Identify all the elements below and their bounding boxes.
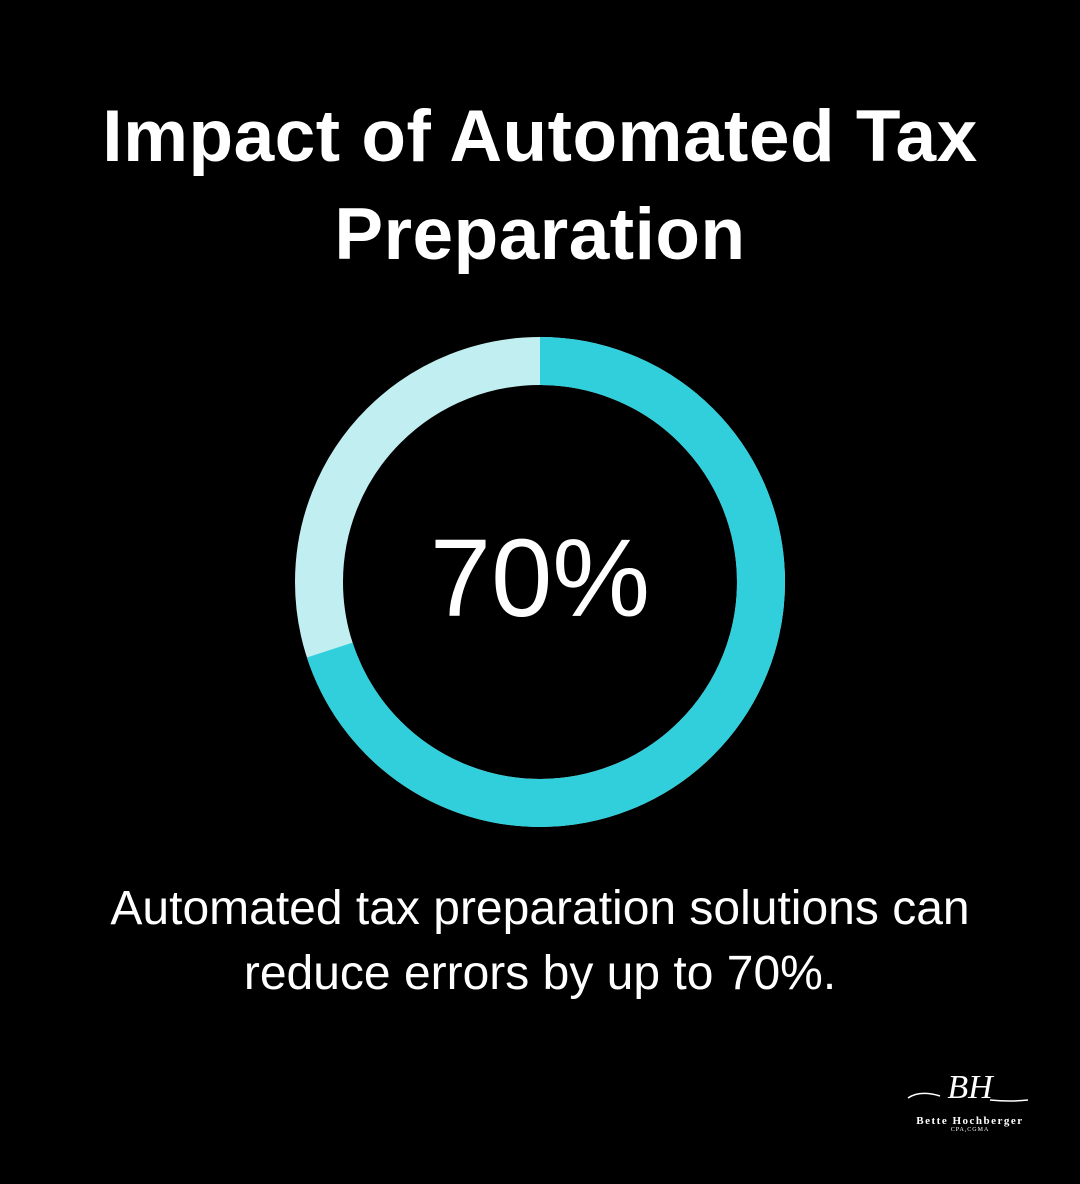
logo	[908, 1069, 1028, 1133]
title: Impact of Automated Tax	[102, 96, 978, 177]
logo: Bette Hochberger	[916, 1115, 1024, 1127]
description	[110, 882, 970, 1000]
title	[102, 96, 978, 275]
description: reduce errors by up to 70%.	[244, 947, 836, 1000]
donut chart: 70%	[430, 517, 650, 640]
logo: BH	[947, 1069, 995, 1106]
description: Automated tax preparation solutions can	[110, 882, 970, 935]
logo: CPA,CGMA	[951, 1127, 989, 1133]
title: Preparation	[334, 194, 746, 275]
